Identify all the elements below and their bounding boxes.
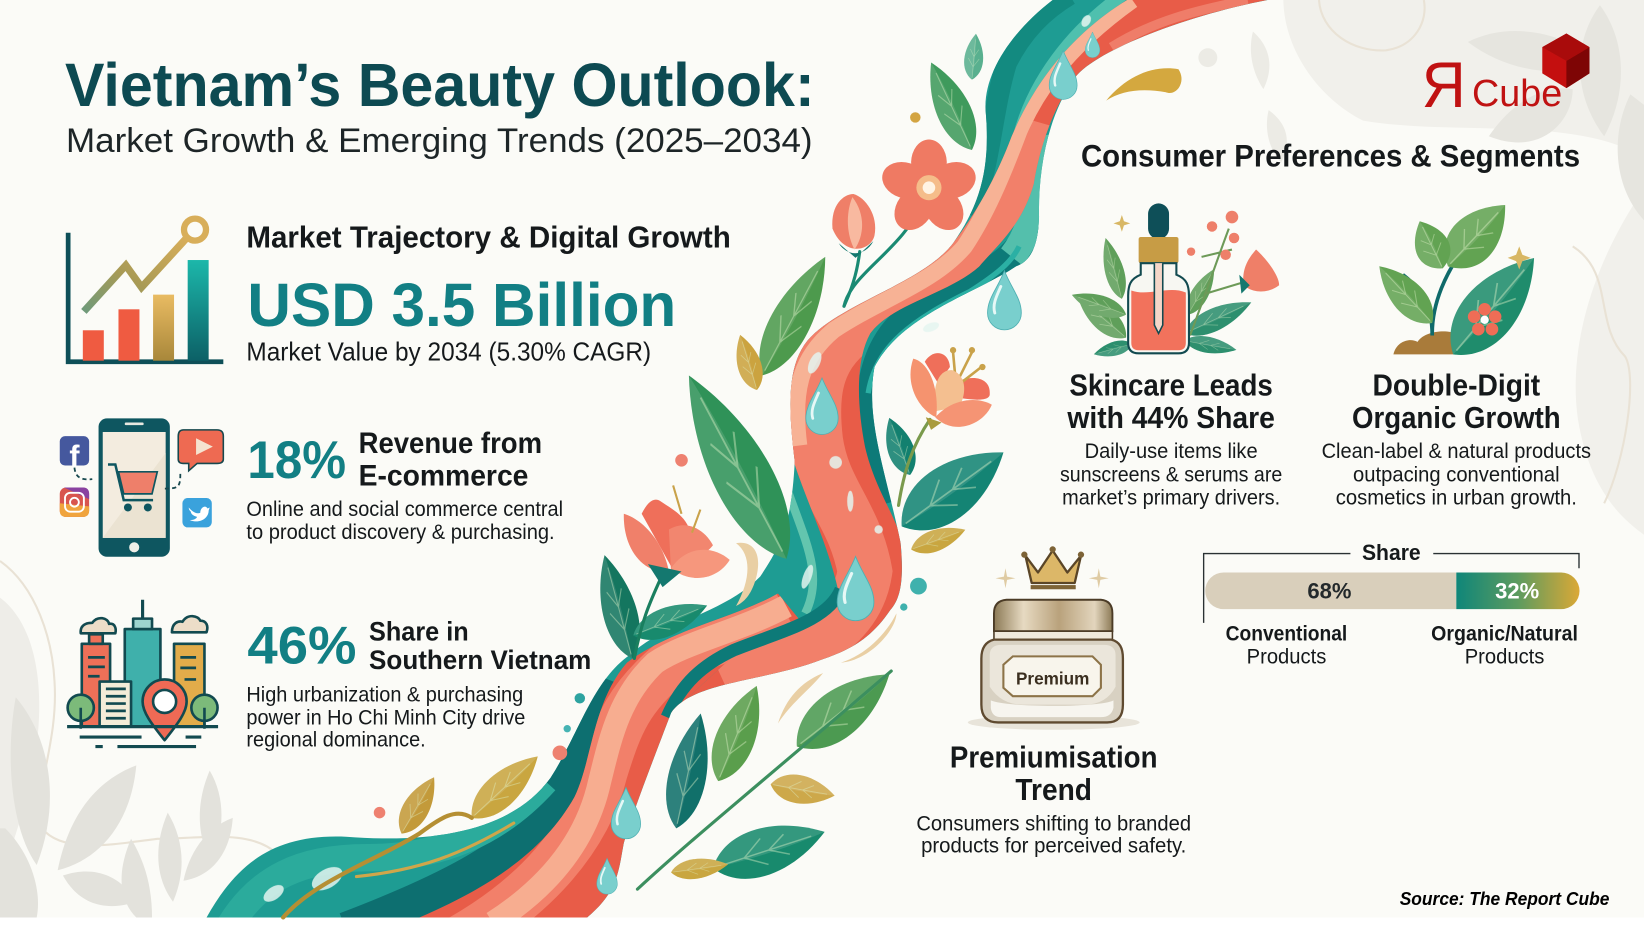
- block: organic growth: Organic Growth: [1352, 401, 1561, 435]
- logo: Cube: [1472, 72, 1562, 114]
- logo: [1422, 34, 1589, 121]
- block: skincare: sunscreens & serums are: [1060, 463, 1282, 486]
- block: organic growth: Clean-label & natural products: [1322, 440, 1591, 463]
- water droplets: [597, 32, 1100, 894]
- heading: consumer preferences: Consumer Preferences & Segments: [1081, 139, 1580, 174]
- block: organic growth: cosmetics in urban growth.: [1336, 486, 1577, 509]
- flower: coral tulip left: [624, 485, 730, 587]
- icon: premium jar: Premium: [1016, 669, 1089, 689]
- ribbon: dark teal stripe: [667, 589, 841, 717]
- chart: share bar: Products: [1465, 646, 1544, 669]
- stat: 18% e-commerce: [246, 427, 563, 544]
- stat: 46% southern vietnam: Southern Vietnam: [369, 644, 591, 675]
- stat: 46% southern vietnam: power in Ho Chi Minh City drive: [246, 707, 525, 730]
- block: organic growth: [1322, 368, 1591, 509]
- chart: share bar: Products: [1247, 646, 1326, 669]
- decorative dots and gold swoosh: [374, 68, 1182, 818]
- title: [65, 51, 815, 160]
- connector dashes: [74, 468, 180, 489]
- icon: growth chart: [68, 219, 223, 362]
- icon: premium jar: [968, 546, 1140, 730]
- icon: city with map pin: [67, 600, 218, 747]
- block: skincare: Daily-use items like: [1085, 440, 1258, 463]
- stat: 18% e-commerce: to product discovery & purchasing.: [246, 521, 555, 544]
- botanical leaves: [390, 33, 1019, 891]
- stat: 18% e-commerce: E-commerce: [359, 459, 528, 492]
- background decoration: bottom-left grey foliage: [0, 561, 278, 917]
- ribbon: main coral band: [671, 0, 1268, 713]
- branch stems: [283, 199, 930, 917]
- chart: share bar: [1204, 540, 1580, 669]
- block: skincare: with 44% Share: [1066, 401, 1275, 435]
- block: premiumisation: Premiumisation: [950, 741, 1158, 775]
- stat: USD 3.5 Billion: USD 3.5 Billion: [247, 271, 676, 339]
- chart: share bar: Share: [1362, 540, 1421, 565]
- ribbon: lower dark teal: [351, 682, 613, 925]
- ribbon highlights: [261, 13, 1093, 905]
- stat: 18% e-commerce: 18%: [247, 432, 346, 490]
- stat: 18% e-commerce: Online and social commerce central: [246, 498, 563, 521]
- ribbon: lower coral band: [419, 593, 807, 917]
- flower: peach bloom: [910, 347, 992, 430]
- block: skincare: Skincare Leads: [1069, 368, 1273, 402]
- stat: 46% southern vietnam: 46%: [247, 618, 356, 676]
- icon: video bubble: [178, 430, 223, 471]
- ribbon: upper teal tones: [970, 0, 1069, 215]
- icon: facebook: [60, 436, 89, 474]
- chart: share bar: Conventional: [1226, 623, 1347, 646]
- block: organic growth: Double-Digit: [1372, 368, 1540, 402]
- subtitle: Market Growth & Emerging Trends (2025–2034): [66, 122, 813, 160]
- block: skincare: market’s primary drivers.: [1062, 486, 1280, 509]
- stat: 18% e-commerce: Revenue from: [359, 427, 542, 460]
- title: Vietnam’s Beauty Outlook:: [65, 51, 815, 119]
- block: premiumisation: products for perceived safety.: [921, 834, 1186, 857]
- icon: bird badge: [182, 498, 212, 527]
- source note: Source: The Report Cube: [1400, 888, 1609, 909]
- section: market trajectory: Market Trajectory & Digital Growth: [246, 220, 731, 254]
- flowing ribbon: [199, 0, 1279, 925]
- ribbon: mid teal band: [788, 493, 813, 613]
- block: premiumisation: Trend: [1015, 773, 1092, 807]
- flower: coral five petal: [877, 139, 981, 238]
- icon: serum bottle with botanicals: [1068, 203, 1279, 361]
- block: organic growth: outpacing conventional: [1353, 463, 1560, 486]
- icon: facebook: f: [69, 440, 80, 474]
- logo: Я: [1422, 48, 1466, 121]
- background decoration: top-right grey foliage: [1198, 0, 1644, 535]
- stat: 46% southern vietnam: [246, 616, 591, 752]
- block: skincare: [1060, 368, 1282, 509]
- stat: 46% southern vietnam: High urbanization & purchasing: [246, 683, 523, 706]
- block: premiumisation: [916, 741, 1191, 857]
- icon: instagram: [60, 488, 89, 517]
- stat: 46% southern vietnam: Share in: [369, 616, 469, 647]
- block: premiumisation: Consumers shifting to branded: [916, 812, 1191, 835]
- market value caption: Market Value by 2034 (5.30% CAGR): [246, 337, 651, 367]
- stat: 46% southern vietnam: regional dominance.: [246, 729, 426, 752]
- flower: tulip bud: [832, 194, 875, 258]
- chart: share bar: 68%: [1307, 579, 1351, 604]
- section: market trajectory: [246, 220, 731, 367]
- chart: share bar: Organic/Natural: [1431, 623, 1578, 646]
- chart: share bar: 32%: [1495, 579, 1539, 604]
- icon: organic plant: [1368, 189, 1555, 372]
- icon: phone with cart and social icons: [60, 418, 223, 557]
